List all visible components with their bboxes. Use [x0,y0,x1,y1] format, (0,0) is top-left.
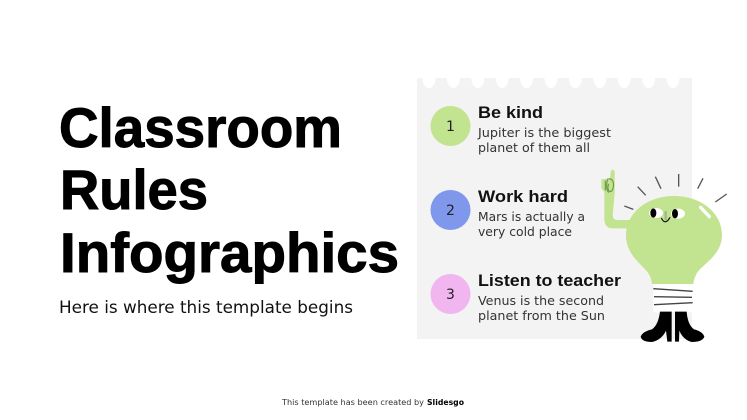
description 2: very cold place [478,224,572,239]
description 1: planet of them all [478,140,590,155]
footer credit: Slidesgo [427,398,464,407]
description 3: Venus is the second [478,293,604,308]
rule 2: work hard [430,187,585,239]
title [59,96,399,284]
description 3 [478,293,605,323]
bulb face [649,208,685,222]
bulb highlight [701,207,709,217]
title: Rules [60,158,208,221]
description 2: Mars is actually a [478,209,585,224]
number badge 3: 3 [446,287,455,303]
panel: torn notepaper [417,68,692,339]
number badge 2: 2 [446,203,455,219]
heading: work hard: Work hard [478,187,568,206]
description 1 [477,125,611,155]
bulb fingers [605,179,614,193]
rule 1: be kind [430,103,611,155]
description 2 [478,209,585,239]
title: Infographics [60,221,399,284]
subtitle: Here is where this template begins [59,298,353,317]
heading: listen to teacher: Listen to teacher [478,271,621,290]
bulb base [653,282,693,312]
description 1: Jupiter is the biggest [477,125,611,140]
title: Classroom [59,96,342,159]
number badge 3 [430,274,470,314]
heading: be kind: Be kind [478,103,543,122]
rule 3: listen to teacher [430,271,621,323]
bulb arm [601,170,640,228]
number badge 1 [430,106,470,146]
description 3: planet from the Sun [478,308,605,323]
bulb glass [626,196,722,284]
bulb boots [641,312,704,342]
number badge 2 [430,190,470,230]
icon: light bulb character [601,170,727,342]
bulb screw lines [653,289,693,305]
number badge 1: 1 [446,119,455,135]
footer credit: This template has been created by [281,398,424,407]
bulb light rays [624,174,727,209]
